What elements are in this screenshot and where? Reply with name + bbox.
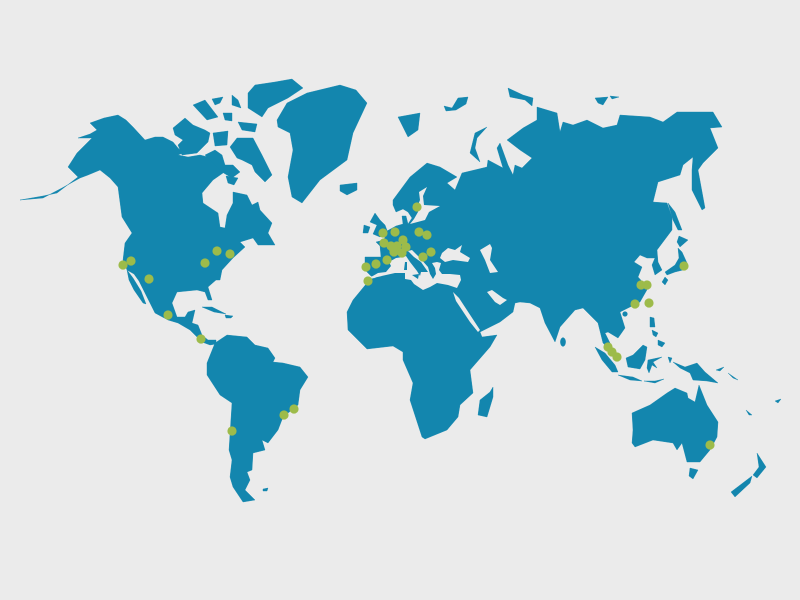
Iceland (340, 183, 357, 195)
Sulawesi (647, 357, 662, 373)
marker: Australia (705, 440, 715, 450)
Borneo (626, 345, 647, 369)
Hokkaido (677, 236, 688, 247)
markers: South America (227, 404, 299, 436)
markers: North America (118, 246, 235, 344)
Tasmania (689, 468, 698, 479)
Visayas (652, 330, 658, 337)
Honshu (665, 248, 687, 275)
Novaya Zemlya (470, 127, 487, 162)
Corsica and Sardinia (404, 262, 407, 270)
Sakhalin (668, 203, 682, 230)
New Guinea (673, 362, 718, 383)
Baja California (127, 270, 146, 304)
Caspian Sea (480, 244, 498, 273)
New Zealand North Island (753, 453, 766, 478)
Moluccas (668, 357, 672, 363)
Australia (632, 385, 718, 462)
New Siberian Islands (595, 97, 608, 105)
Bathurst Island (223, 113, 232, 121)
South America (207, 335, 308, 502)
New Caledonia (746, 410, 752, 415)
location markers (118, 202, 715, 450)
Hainan (623, 312, 627, 316)
markers: Europe (361, 202, 436, 286)
Java (618, 375, 642, 381)
Luzon (650, 317, 655, 327)
Black Sea (440, 245, 470, 262)
Svalbard (398, 113, 420, 137)
Ireland (363, 225, 370, 233)
markers: Asia (603, 261, 689, 362)
Mediterranean Sea (371, 250, 461, 290)
Fiji (775, 399, 781, 403)
Red Sea (453, 292, 480, 332)
Prince of Wales and Somerset Islands (213, 131, 228, 146)
Eurasia (365, 107, 722, 357)
Devon Island (238, 122, 257, 132)
Severnaya Zemlya (508, 88, 533, 106)
New Britain (716, 367, 724, 371)
Wrangel Island (610, 96, 619, 99)
Great Britain (370, 213, 388, 237)
Franz Josef Land (444, 97, 468, 111)
Ellesmere Island (248, 79, 303, 117)
North America (20, 115, 275, 345)
Melville Island group (193, 100, 218, 120)
Hispaniola (225, 315, 233, 318)
Mindanao (658, 340, 665, 347)
New Zealand South Island (731, 476, 752, 497)
Lesser Sunda Islands (644, 379, 664, 383)
Banks and Victoria Islands (173, 118, 210, 155)
Southampton Island (226, 176, 238, 185)
Madagascar (478, 387, 493, 417)
Solomon Islands (728, 373, 738, 380)
Greenland (277, 85, 367, 203)
Persian Gulf (487, 290, 507, 305)
Sri Lanka (560, 338, 566, 346)
Cuba (202, 307, 226, 314)
land masses (20, 79, 781, 502)
inland seas (371, 187, 507, 332)
Baffin Island (230, 138, 272, 182)
Prince Patrick Island (212, 97, 223, 105)
Baltic Sea (410, 187, 440, 224)
Africa (347, 272, 497, 439)
Boothia and Melville peninsulas (205, 150, 240, 178)
Axel Heiberg Island (232, 95, 241, 108)
Kyushu (662, 277, 668, 285)
Sumatra (595, 347, 618, 372)
Canadian Arctic islands (173, 79, 303, 185)
Falkland Islands (263, 488, 268, 491)
Sicily (412, 274, 419, 279)
